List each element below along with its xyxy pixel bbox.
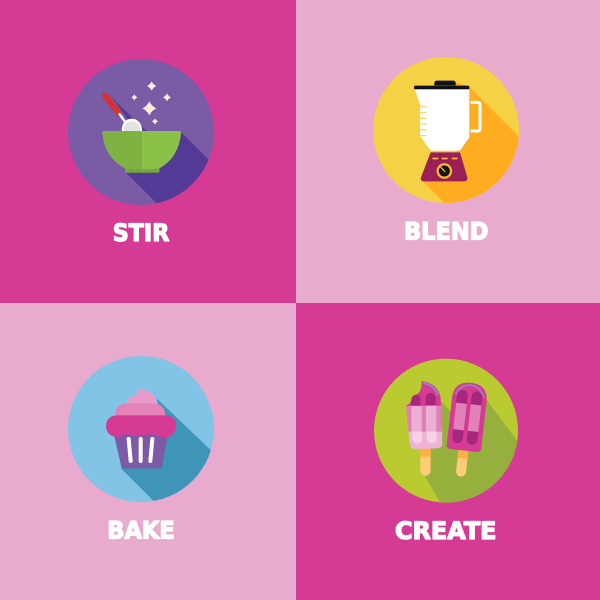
panel: blend (296, 0, 600, 303)
heading: create: CREATE (395, 517, 496, 545)
icon: popsicles (374, 358, 518, 503)
icon: blender (373, 57, 519, 203)
panel: create (374, 358, 518, 540)
panel: stir (68, 59, 214, 242)
right popsicle (443, 381, 488, 479)
icon: stir bowl (68, 59, 214, 205)
icon: cupcake (68, 356, 214, 502)
left popsicle (406, 381, 442, 476)
heading: blend: BLEND (404, 217, 488, 245)
panel: bake (0, 303, 296, 600)
heading: bake: BAKE (107, 516, 175, 544)
heading: stir: STIR (113, 219, 169, 247)
